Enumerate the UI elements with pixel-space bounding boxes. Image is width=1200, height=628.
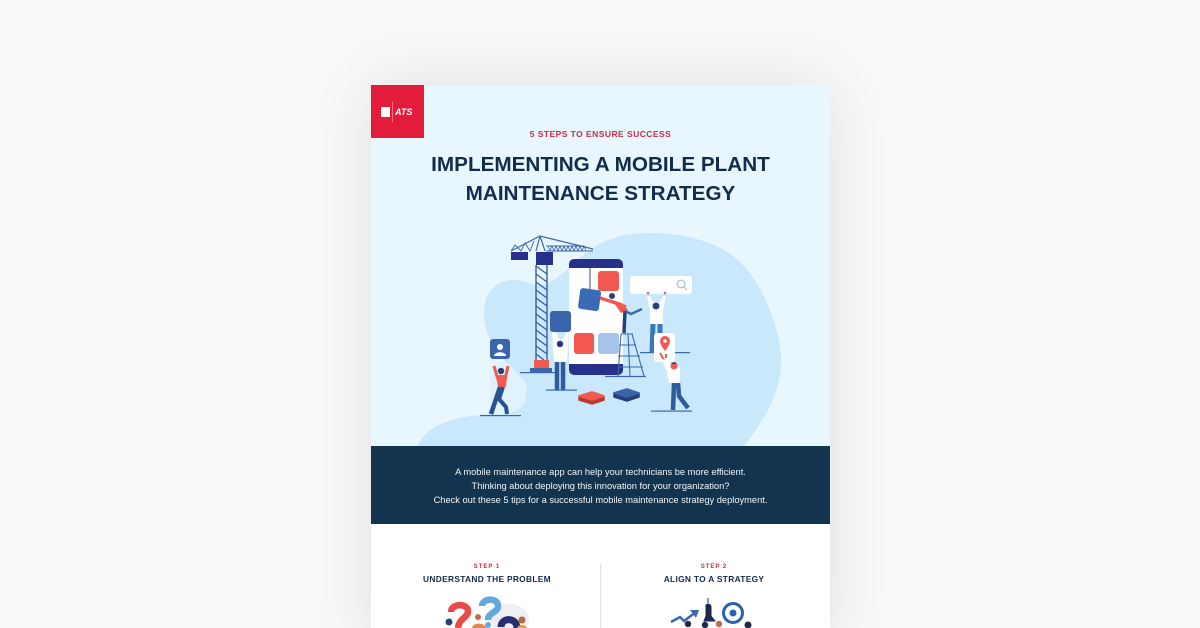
eyebrow: 5 STEPS TO ENSURE SUCCESS	[530, 129, 671, 139]
blue platform	[614, 389, 639, 401]
hanging block	[578, 268, 601, 311]
step 1 label: STEP 1	[474, 564, 500, 570]
icon: question marks and people	[446, 600, 529, 628]
phone	[569, 259, 623, 375]
person holding blue tile	[546, 311, 577, 391]
title: MAINTENANCE STRATEGY	[466, 182, 735, 205]
panel: header background	[371, 85, 830, 446]
column divider	[600, 564, 601, 628]
logo: ATS red badge	[371, 85, 424, 138]
search bar	[630, 276, 692, 294]
intro text: Thinking about deploying this innovation for your organization?	[472, 481, 729, 491]
intro text: A mobile maintenance app can help your technicians be more efficient.	[455, 467, 746, 477]
logo: ATS red badge: ATS	[395, 107, 412, 117]
intro band	[371, 446, 830, 524]
step 2 heading: ALIGN TO A STRATEGY	[664, 574, 764, 584]
title: IMPLEMENTING A MOBILE PLANT	[431, 153, 770, 176]
step 1 heading: UNDERSTAND THE PROBLEM	[423, 574, 551, 584]
person on ladder	[600, 293, 642, 333]
person holding profile icon	[480, 339, 521, 416]
light halo behind left figure	[488, 362, 526, 414]
intro text	[434, 467, 767, 505]
step 2 label: STEP 2	[701, 564, 727, 570]
title	[431, 153, 770, 205]
person holding search bar	[640, 292, 690, 353]
red platform	[579, 392, 604, 404]
crane	[511, 236, 593, 373]
intro text: Check out these 5 tips for a successful mobile maintenance strategy deployment.	[434, 495, 767, 505]
icon: chess piece, growth arrow and target	[671, 598, 752, 628]
person holding map pin	[651, 333, 692, 412]
ladder	[605, 334, 646, 376]
background blob	[418, 233, 781, 446]
panel: infographic document	[371, 85, 830, 628]
